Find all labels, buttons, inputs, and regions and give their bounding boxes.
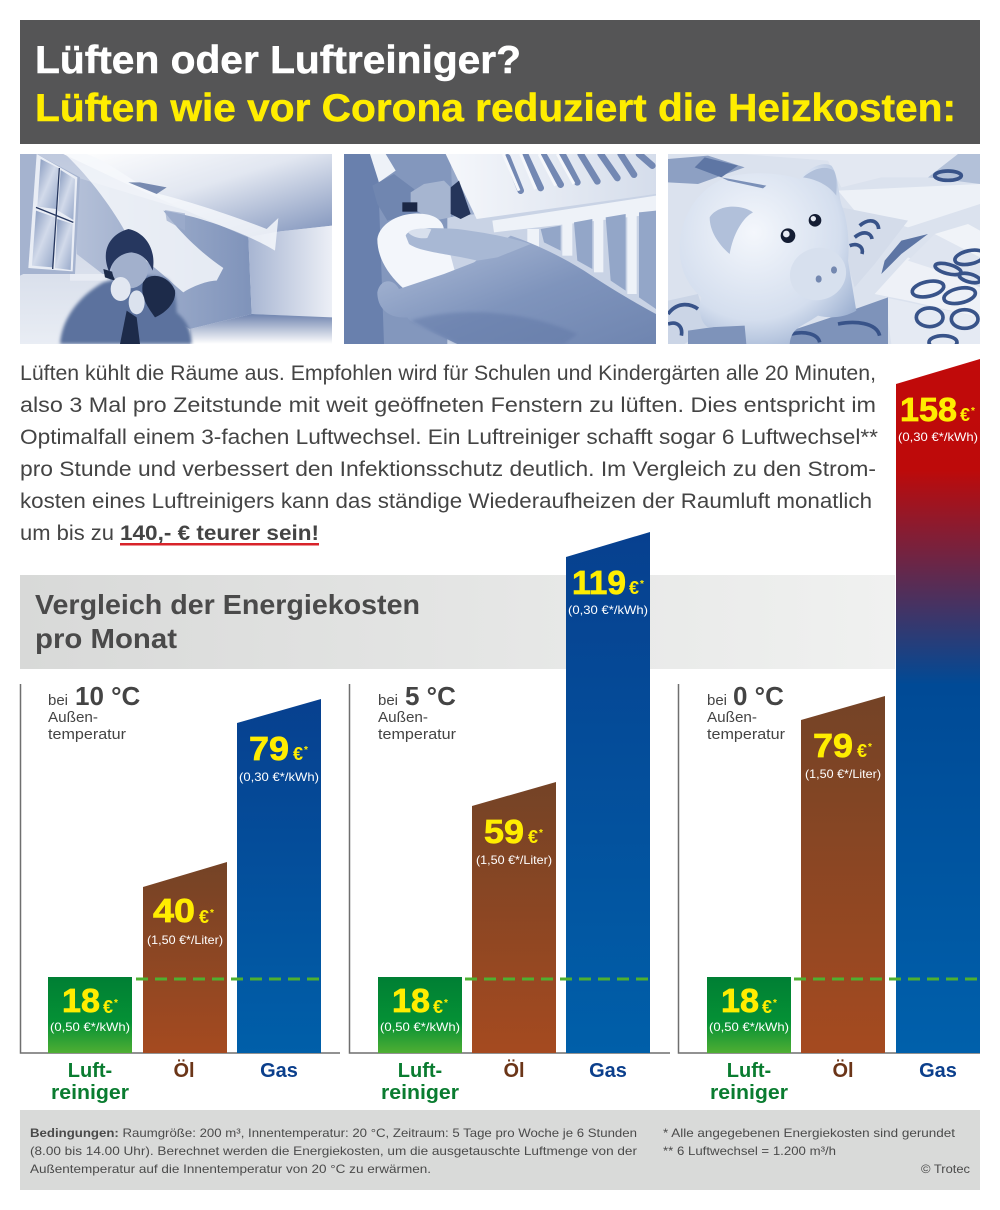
temperature label: temperatur <box>378 727 456 743</box>
footnotes <box>663 1126 970 1176</box>
axis labels: reiniger <box>710 1082 788 1104</box>
bar: Luftreiniger 18 €: (0,50 €*/kWh) <box>709 1020 789 1034</box>
bar: Luftreiniger 18 €: * <box>114 998 118 1009</box>
bar: Öl 59 € <box>472 782 556 1053</box>
bar: Gas 119 €: 119 <box>572 564 626 601</box>
bar: Luftreiniger 18 €: € <box>433 997 443 1017</box>
bar: Öl 79 €: * <box>868 742 872 753</box>
bar: Luftreiniger 18 € <box>378 977 462 1053</box>
section heading band <box>20 575 895 669</box>
axis labels: Gas <box>260 1060 298 1082</box>
bar: Öl 79 €: (1,50 €*/Liter) <box>805 767 881 781</box>
footnotes: ** 6 Luftwechsel = 1.200 m³/h <box>663 1144 836 1158</box>
chart: 10 °C <box>20 681 340 1104</box>
highlighted saving: 140,- € teurer sein! <box>120 521 319 545</box>
bar: Luftreiniger 18 €: 18 <box>62 982 100 1019</box>
temperature label: temperatur <box>48 727 126 743</box>
chart: 0 °C <box>678 359 980 1104</box>
photo: freezing child at open window <box>20 154 332 344</box>
bar: Luftreiniger 18 €: € <box>762 997 772 1017</box>
bar: Öl 59 €: € <box>528 827 538 847</box>
title line 1: Lüften oder Luftreiniger? <box>35 39 521 82</box>
axis labels <box>710 1059 957 1104</box>
photo: piggy bank on euro notes <box>668 154 986 349</box>
bar: Gas 119 €: * <box>640 579 644 590</box>
intro paragraph: Lüften kühlt die Räume aus. Empfohlen wird für Schulen und Kindergärten alle 20 Minuten, <box>20 361 876 385</box>
bar: Luftreiniger 18 €: (0,50 €*/kWh) <box>380 1020 460 1034</box>
temperature label: bei <box>707 692 727 709</box>
temperature label: bei <box>48 692 68 709</box>
bar: Gas 119 €: (0,30 €*/kWh) <box>568 603 648 617</box>
axis labels: Öl <box>503 1059 525 1082</box>
axis labels: Luft- <box>727 1060 771 1082</box>
bar: Öl 59 €: 59 <box>484 813 524 850</box>
bar: Öl 40 € <box>143 862 227 1053</box>
bar: Öl 40 €: (1,50 €*/Liter) <box>147 933 223 947</box>
bar: Luftreiniger 18 €: * <box>773 998 777 1009</box>
bar: Gas 158 €: * <box>971 406 975 417</box>
temperature label: 5 °C <box>405 681 456 711</box>
temperature label: Außen- <box>48 710 98 726</box>
axis labels <box>51 1059 298 1104</box>
bar: Öl 40 €: € <box>199 907 209 927</box>
footer conditions panel <box>20 1110 980 1190</box>
section heading band: Vergleich der Energiekosten <box>35 589 420 620</box>
bar: Gas 79 €: * <box>304 745 308 756</box>
bar: Öl 79 €: 79 <box>813 727 853 764</box>
axis labels: reiniger <box>51 1082 129 1104</box>
bar: Öl 59 €: (1,50 €*/Liter) <box>476 853 552 867</box>
bar: Gas 158 €: 158 <box>900 391 957 428</box>
temperature label: bei <box>378 692 398 709</box>
temperature label: Außen- <box>707 710 757 726</box>
bar: Luftreiniger 18 € <box>707 977 791 1053</box>
intro paragraph: um bis zu <box>20 521 114 545</box>
temperature label: temperatur <box>707 727 785 743</box>
axis labels: Luft- <box>68 1060 112 1082</box>
intro paragraph: Optimalfall einem 3-fachen Luftwechsel. Ein Luftreiniger schafft sogar 6 Luftwechsel** <box>20 425 879 449</box>
bar: Gas 158 €: € <box>960 405 970 425</box>
bar: Gas 119 € <box>566 532 650 1053</box>
title line 2: Lüften wie vor Corona reduziert die Heizkosten: <box>35 87 956 130</box>
bar: Luftreiniger 18 €: (0,50 €*/kWh) <box>50 1020 130 1034</box>
temperature label: Außen- <box>378 710 428 726</box>
bar: Gas 158 € <box>896 359 980 1053</box>
intro paragraph <box>20 361 879 546</box>
conditions text <box>30 1126 637 1176</box>
bar: Öl 40 €: 40 <box>153 892 195 929</box>
bar: Gas 119 €: € <box>629 578 639 598</box>
bar: Gas 79 € <box>237 699 321 1053</box>
axis labels: Gas <box>589 1060 627 1082</box>
temperature label <box>707 681 785 743</box>
photo: hand on radiator thermostat <box>344 154 656 344</box>
bar: Luftreiniger 18 €: 18 <box>392 982 430 1019</box>
axis labels: Öl <box>173 1059 195 1082</box>
intro paragraph: pro Stunde und verbessert den Infektionsschutz deutlich. Im Vergleich zu den Strom- <box>20 457 876 481</box>
title banner <box>20 20 980 144</box>
bar: Luftreiniger 18 €: 18 <box>721 982 759 1019</box>
conditions text: Außentemperatur auf die Innentemperatur von 20 °C zu erwärmen. <box>30 1162 431 1176</box>
bar: Gas 79 €: 79 <box>249 730 289 767</box>
bar: Gas 158 €: (0,30 €*/kWh) <box>898 430 978 444</box>
axis labels: Gas <box>919 1060 957 1082</box>
section heading band: pro Monat <box>35 623 177 654</box>
chart: 5 °C <box>350 532 670 1104</box>
conditions text: Bedingungen: Raumgröße: 200 m³, Innentemperatur: 20 °C, Zeitraum: 5 Tage pro Woche je 6 Stunden <box>30 1126 637 1140</box>
intro paragraph: also 3 Mal pro Zeitstunde mit weit geöffneten Fenstern zu lüften. Dies entspricht im <box>20 393 876 417</box>
bar: Öl 40 €: * <box>210 908 214 919</box>
axis labels: Öl <box>832 1059 854 1082</box>
temperature label: 10 °C <box>75 681 141 711</box>
footnotes: © Trotec <box>921 1162 970 1176</box>
bar: Öl 79 € <box>801 696 885 1053</box>
bar: Luftreiniger 18 €: € <box>103 997 113 1017</box>
axis labels: Luft- <box>398 1060 442 1082</box>
axis labels <box>381 1059 627 1104</box>
footnotes: * Alle angegebenen Energiekosten sind gerundet <box>663 1126 956 1140</box>
bar: Luftreiniger 18 €: * <box>444 998 448 1009</box>
temperature label <box>48 681 141 743</box>
bar: Luftreiniger 18 € <box>48 977 132 1053</box>
bar: Gas 79 €: € <box>293 744 303 764</box>
axis labels: reiniger <box>381 1082 459 1104</box>
bar: Öl 79 €: € <box>857 741 867 761</box>
bar: Öl 59 €: * <box>539 828 543 839</box>
temperature label <box>378 681 456 743</box>
intro paragraph: kosten eines Luftreinigers kann das ständige Wiederaufheizen der Raumluft monatlich <box>20 489 872 513</box>
conditions text: (8.00 bis 14.00 Uhr). Berechnet werden die Energiekosten, um die ausgetauschte Luftmenge von der <box>30 1144 637 1158</box>
bar: Gas 79 €: (0,30 €*/kWh) <box>239 770 319 784</box>
temperature label: 0 °C <box>733 681 784 711</box>
